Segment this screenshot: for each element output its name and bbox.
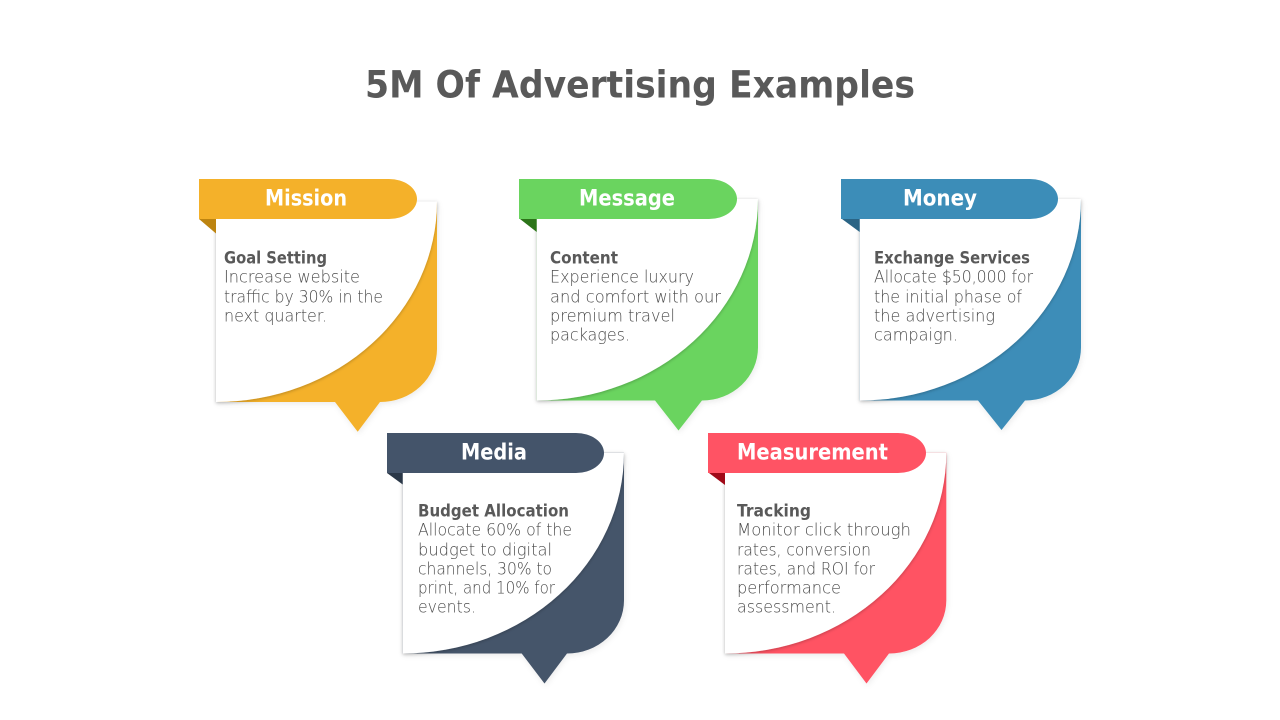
message fold [520, 219, 537, 232]
media fold [387, 473, 403, 484]
mission fold [199, 219, 216, 234]
mission text: traffic by 30% in the [224, 286, 383, 306]
media text: events. [418, 596, 476, 616]
media text: Budget Allocation [418, 502, 569, 520]
media text: Allocate 60% of the [418, 520, 572, 540]
mission text: Increase website [224, 266, 360, 286]
panel: mission [199, 179, 437, 432]
message text [550, 248, 721, 344]
mission text: Goal Setting [224, 248, 327, 268]
mission text: next quarter. [224, 306, 327, 326]
media heading: Media [461, 440, 527, 466]
measurement text: rates, conversion [737, 540, 871, 560]
money heading: Money [903, 186, 977, 212]
media white paper [403, 453, 624, 654]
media text: channels, 30% to [418, 558, 552, 578]
mission speech bubble background [216, 202, 437, 432]
message white paper [537, 199, 758, 400]
message text: Content [550, 248, 618, 268]
money tab [841, 179, 1058, 219]
measurement text: assessment. [737, 596, 836, 616]
media speech bubble background [403, 453, 624, 684]
media text: print, and 10% for [418, 578, 555, 598]
mission heading: Mission [265, 186, 347, 212]
panel: measurement [708, 433, 946, 684]
money fold [842, 219, 860, 232]
message text: and comfort with our [550, 286, 721, 306]
money text: Allocate $50,000 for [874, 266, 1033, 286]
measurement text [737, 502, 911, 616]
mission text [224, 248, 383, 326]
measurement speech bubble background [725, 453, 946, 684]
panel: money [841, 179, 1081, 430]
measurement text: performance [737, 578, 841, 598]
money white paper [860, 199, 1081, 400]
measurement text: Tracking [737, 502, 811, 520]
message heading: Message [579, 186, 675, 212]
mission white paper [216, 202, 437, 402]
measurement text: Monitor click through [737, 520, 911, 540]
money text: the advertising [874, 306, 995, 326]
measurement fold [709, 473, 725, 485]
money text: the initial phase of [874, 286, 1022, 306]
money text: Exchange Services [874, 248, 1030, 268]
message text: premium travel [550, 306, 675, 326]
media text: budget to digital [418, 540, 552, 560]
measurement white paper [725, 453, 946, 654]
message text: Experience luxury [550, 266, 694, 286]
title: 5M Of Advertising Examples [365, 64, 915, 106]
money text: campaign. [874, 324, 958, 344]
mission tab [199, 179, 417, 219]
measurement heading: Measurement [737, 440, 888, 466]
panel: media [387, 433, 624, 684]
message tab [519, 179, 737, 219]
money text [874, 248, 1033, 344]
measurement text: rates, and ROI for [737, 558, 875, 578]
message speech bubble background [537, 199, 758, 430]
media text [418, 502, 572, 616]
message text: packages. [550, 324, 630, 344]
media tab [387, 433, 604, 473]
panel: message [519, 179, 758, 430]
money speech bubble background [860, 199, 1081, 430]
measurement tab [708, 433, 926, 473]
